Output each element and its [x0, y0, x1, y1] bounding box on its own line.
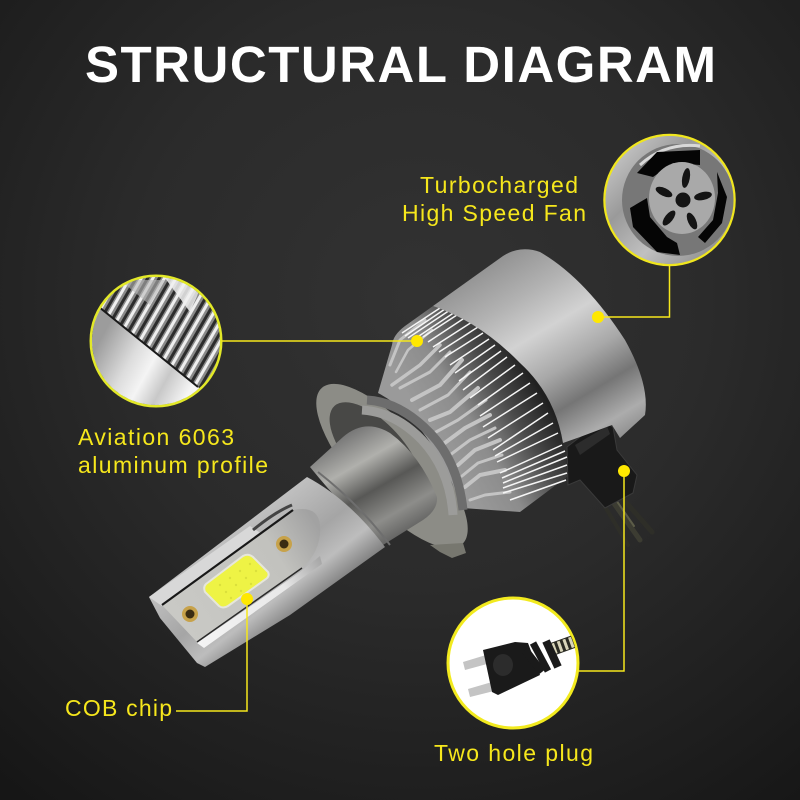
label: aluminum [78, 424, 268, 478]
hub [649, 162, 715, 234]
label: fan: High Speed Fan [402, 200, 586, 226]
callout: fan leader [592, 265, 670, 323]
collar ring [362, 400, 463, 515]
PCB plate [162, 509, 320, 642]
inset: fan [604, 135, 736, 267]
label: plug: Two hole plug [434, 740, 593, 766]
inset: aluminum fins [90, 275, 222, 410]
neck [310, 426, 437, 545]
label: aluminum: Aviation 6063 [78, 424, 234, 450]
inset: plug [448, 598, 578, 728]
callout: plug leader [578, 465, 630, 671]
screw near tip [182, 606, 198, 622]
fan blades [630, 150, 727, 255]
flange [294, 363, 490, 569]
callout: chip leader [176, 593, 253, 711]
fan housing can [433, 249, 646, 443]
title: STRUCTURAL DIAGRAM [85, 36, 716, 93]
top rail [149, 526, 262, 606]
headlight bulb [149, 249, 652, 667]
pins [463, 655, 487, 670]
label: aluminum: aluminum profile [78, 452, 268, 478]
label: fan: Turbocharged [420, 172, 578, 198]
braided wires [604, 493, 652, 545]
plug socket [567, 420, 637, 508]
lower bright rail [197, 556, 322, 648]
hub holes [654, 167, 713, 231]
label: COB chip: COB chip [65, 695, 172, 721]
cable [553, 640, 578, 649]
COB chip [204, 555, 269, 608]
LED board body [149, 472, 390, 667]
body shoulder arcs [318, 472, 390, 545]
plug head [483, 642, 540, 695]
label: fan [402, 172, 586, 226]
screw near neck [276, 536, 292, 552]
callout: fins leader [221, 335, 423, 347]
heat sink fins [378, 306, 568, 512]
